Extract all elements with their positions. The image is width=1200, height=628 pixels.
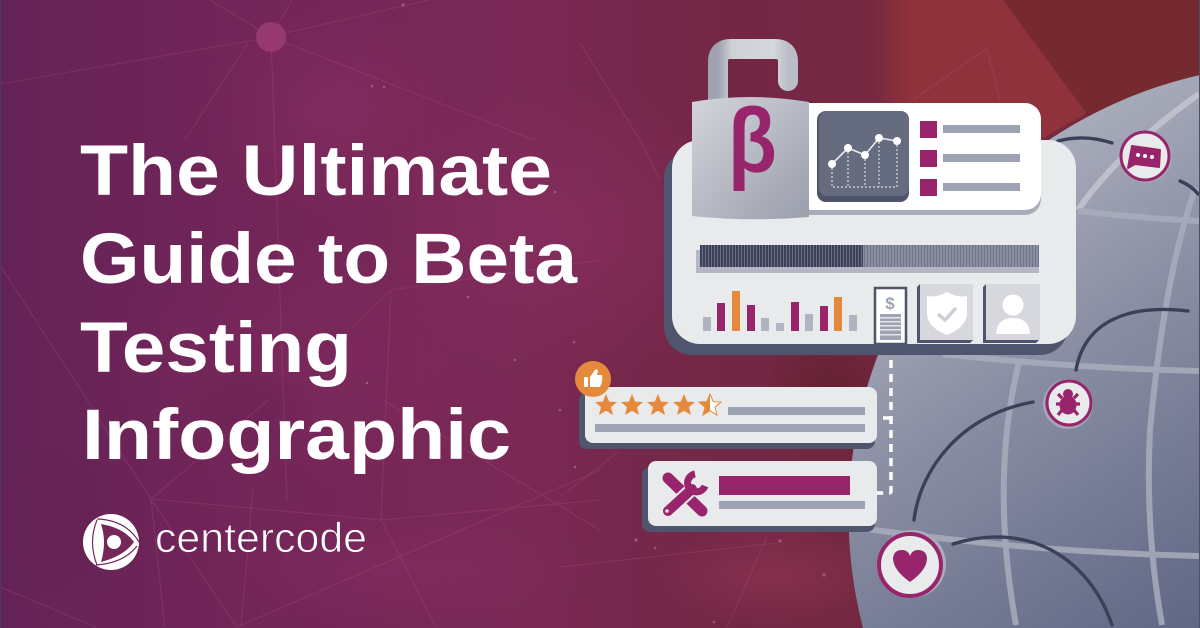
shackle: [718, 49, 788, 100]
title: Testing: [80, 309, 352, 388]
connector arcs: [914, 138, 1198, 625]
person tile: [983, 284, 1040, 343]
shield tile: [917, 284, 973, 343]
beta symbol: β: [728, 90, 777, 192]
progress strip: [696, 245, 1039, 273]
title: The Ultimate: [80, 132, 552, 211]
centercode logo: [83, 514, 367, 570]
dashed connector: [877, 346, 891, 493]
node circle: [256, 22, 286, 52]
icon: chat: [1120, 131, 1172, 183]
globe: [849, 75, 1200, 628]
tools card: [642, 461, 877, 532]
title: Infographic: [82, 396, 511, 475]
white top panel: [790, 103, 1041, 215]
main dashboard card: [664, 49, 1076, 355]
logo mark: [83, 514, 139, 570]
line chart tile: [817, 111, 909, 202]
title: [80, 132, 578, 475]
wrench and screwdriver icon: [665, 474, 705, 513]
title: Guide to Beta: [80, 220, 578, 299]
star rating: [595, 394, 721, 415]
logo wordmark: centercode: [155, 514, 367, 561]
icon: heart: [878, 530, 946, 598]
receipt icon: $: [885, 294, 895, 313]
padlock: [692, 49, 809, 219]
rating card: [575, 361, 877, 449]
thumbs up badge: [575, 361, 611, 397]
receipt icon: [875, 288, 906, 344]
bar chart: [703, 291, 857, 331]
globe grid lines: [860, 94, 1199, 625]
icon: bug: [1043, 379, 1093, 429]
lock body: [692, 97, 809, 219]
list rows: [920, 121, 1020, 196]
